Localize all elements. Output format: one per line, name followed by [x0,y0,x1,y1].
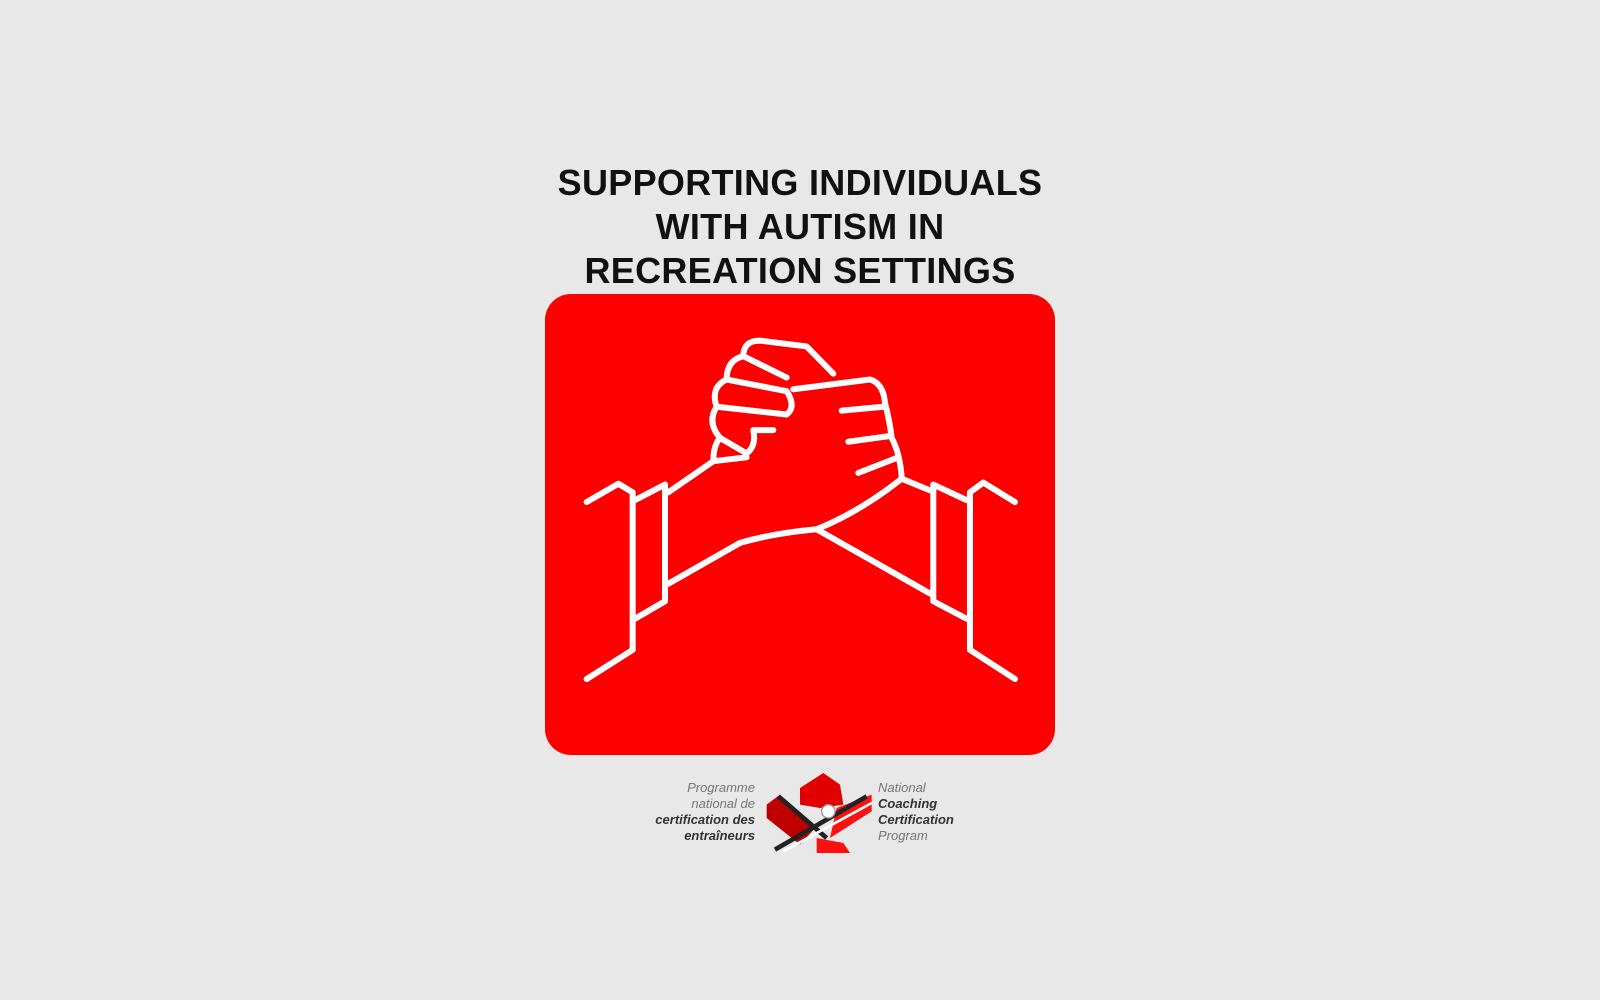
panel: red icon box [545,294,1055,755]
logo text: english: National [878,780,926,795]
logo text: french [655,780,755,843]
title [558,162,1042,291]
title: RECREATION SETTINGS [584,250,1016,291]
logo text: french: entraîneurs [684,828,755,843]
logo text: french: Programme [687,780,755,795]
logo text: english [878,780,954,843]
title: WITH AUTISM IN [656,206,944,247]
logo text: english: Program [878,828,928,843]
logo mark [766,773,872,853]
logo [655,773,954,853]
logo text: english: Coaching [878,796,937,811]
title: SUPPORTING INDIVIDUALS [558,162,1042,203]
logo text: french: certification des [655,812,755,827]
logo text: english: Certification [878,812,954,827]
logo text: french: national de [691,796,755,811]
